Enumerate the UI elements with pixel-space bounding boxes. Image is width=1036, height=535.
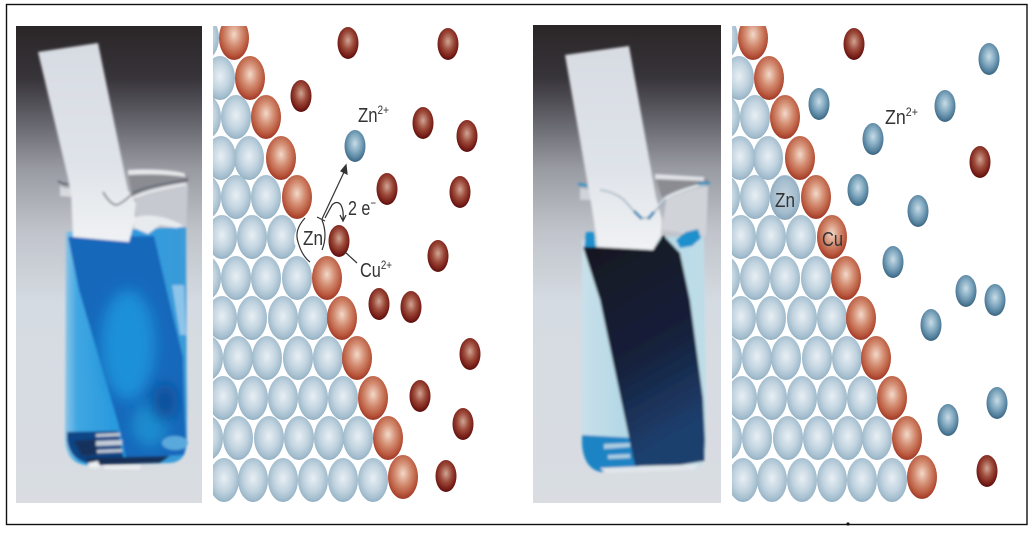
label: Cu2+: Cu [360, 260, 386, 282]
arrow: two electrons transfer [325, 202, 346, 221]
photo: zinc strip coated black, pale solution [533, 25, 721, 503]
white paper strip [565, 46, 662, 250]
blackened zinc strip [583, 235, 705, 466]
blue blobs at the surface [584, 229, 701, 250]
label: 2 electrons: − [370, 196, 376, 210]
beaker rim [58, 169, 189, 228]
label: Zn2+: 2+ [906, 105, 918, 119]
rim in front of paper [103, 192, 133, 205]
copper ions in solution [290, 27, 480, 492]
zinc ions in solution [808, 43, 1008, 436]
remaining copper ions [844, 28, 998, 487]
beaker bottom blue [582, 435, 640, 472]
zinc atom: Zn [775, 190, 795, 212]
label: 2 electrons: 2 e [348, 198, 376, 220]
foam at the surface [134, 216, 184, 234]
diagram: copper deposit after reaction [708, 16, 1008, 502]
rim in front of paper [600, 190, 666, 218]
pale liquid to the right of the strip [172, 285, 186, 335]
highlighted zinc atom [294, 218, 330, 262]
leader line: copper ion [345, 252, 357, 263]
photo: zinc strip in blue copper sulfate solution [16, 26, 202, 503]
copper atom deposited [817, 215, 847, 259]
zinc ion [344, 130, 366, 162]
zinc atom [770, 176, 800, 220]
white paper strip [38, 43, 136, 242]
label: Zn2+: Zn [885, 107, 908, 129]
pale liquid [582, 236, 706, 472]
highlighted zinc atom: Zn [303, 228, 323, 250]
arrow: zinc ion leaving lattice [317, 165, 347, 221]
beaker rim [578, 174, 710, 236]
label: Cu2+: 2+ [381, 258, 392, 272]
copper atom deposited: Cu [822, 229, 843, 251]
beaker bottom [67, 431, 124, 464]
blue liquid [65, 227, 187, 465]
label: Zn2+: 2+ [378, 103, 389, 117]
diagram: zinc lattice with copper deposit, first stage [189, 16, 480, 502]
label: Zn2+: Zn [358, 105, 381, 127]
zinc strip under water [68, 236, 186, 458]
